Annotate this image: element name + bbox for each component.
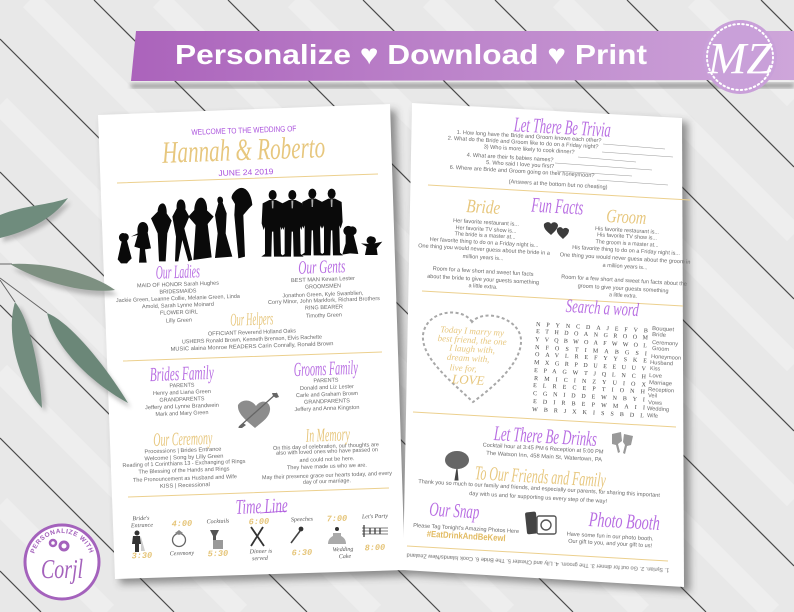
section: our ladies: Amold, Sarah Lynne Moinard [142, 302, 214, 310]
section: our helpers: OFFICIANT Reverend Holland Oaks [208, 328, 296, 338]
badge: personalize with Corjl: PERSONALIZE WITH [30, 528, 94, 554]
section: our ceremony: Welcome | Song by Lilly Green [144, 454, 224, 462]
section: our helpers: Our Helpers [230, 308, 274, 330]
icon: wedding cake [328, 527, 346, 544]
word search grid: NFOSTIMABGSI [535, 345, 647, 357]
section: bride facts [418, 196, 551, 291]
section: bride facts: about the bride to give your guests something [427, 274, 539, 286]
word list: Honeymoon [651, 354, 681, 362]
vow text [437, 324, 507, 388]
leaf: lower right [47, 313, 128, 403]
section: grooms family: Donald and Liz Lester [300, 384, 354, 392]
section: brides family [145, 362, 219, 418]
section: in memory: day of our marriage. [303, 478, 351, 486]
banner headline: Personalize ♥ Download ♥ Print [175, 39, 647, 70]
icon: gears [50, 540, 68, 550]
timeline labels: Dinner is [249, 549, 273, 555]
section: our snap: #EatDrinkAndBeKewl [426, 529, 506, 543]
leaf stem [0, 264, 47, 313]
timeline labels: Ceremony [170, 551, 195, 557]
timeline labels [130, 514, 388, 562]
section: trivia: 3) Who is more likely to cook dinner? [483, 144, 575, 156]
timeline labels: Wedding [332, 547, 353, 553]
icon: champagne glasses [612, 432, 633, 454]
leaf: upper [0, 198, 68, 238]
vow text: Today I marry my [440, 324, 504, 338]
timeline labels: Cake [339, 554, 352, 560]
leaf shadows [3, 202, 131, 412]
timeline labels: Entrance [130, 523, 153, 529]
timeline labels: 4:00 [172, 519, 192, 529]
section: brides family: GRANDPARENTS [159, 396, 205, 404]
logo: MZ monogram [703, 20, 777, 94]
word search grid: RMICINZYUIOX [534, 376, 647, 388]
header: welcome and names: JUNE 24 2019 [218, 167, 274, 178]
section: our ceremony: Processions | Brides Entrance [144, 447, 222, 455]
section: bride facts: Bride [466, 196, 501, 219]
section: timeline [130, 493, 388, 562]
badge: personalize with Corjl [24, 524, 100, 600]
timeline labels: Cocktails [207, 519, 230, 525]
word list: Vows [648, 400, 662, 407]
section: brides family: Jeffery and Lynne Brandwein [145, 403, 219, 411]
heart wreath with vow [423, 312, 521, 402]
section: bride facts: One thing you would never guess about the bride in a [418, 243, 551, 257]
section: grooms family: PARENTS [313, 378, 339, 384]
heading: search a word: Search a word [565, 296, 640, 321]
word search grid: YVQBWOAFWWOL [535, 337, 647, 349]
section: groom facts: Room for a few short and sweet fun facts about the [561, 274, 687, 288]
word list: Wedding [647, 406, 669, 413]
section: groom facts: a million years is... [602, 263, 648, 271]
logo: MZ monogram: MZ [707, 34, 773, 83]
vow text: LOVE [451, 371, 485, 388]
vow text: dream with, [447, 352, 490, 364]
word search grid: ETHDOANGROOM [536, 329, 649, 341]
section: our snap: Our Snap [429, 499, 480, 523]
section: groom facts: Groom [606, 206, 647, 229]
section: our snap: Please Tag Tonight's Amazing Photos Here [413, 523, 519, 535]
section: in memory: and could not be here. [299, 456, 355, 464]
timeline labels: Speeches [291, 517, 314, 523]
icon: cocktail glasses [210, 530, 223, 549]
section: drinks [482, 421, 604, 463]
section: our ladies: MAID OF HONOR Sarah Hughes [137, 281, 219, 289]
section: our ladies: Our Ladies [155, 261, 200, 284]
section: timeline: Time Line [235, 493, 288, 519]
section: our gents: Jonathon Green, Kyle Swanblien, [282, 291, 364, 299]
word search grid: NPYNCDAJEFVB [536, 322, 648, 334]
section: friends and family: To Our Friends and Family [474, 462, 606, 492]
timeline labels: 3:30 [132, 551, 152, 561]
section: brides family: Henry and Liana Green [153, 389, 211, 397]
header: welcome and names: WELCOME TO THE WEDDING OF [191, 124, 297, 137]
section: photo booth [566, 507, 661, 549]
section: our ladies: BRIDESMAIDS [159, 288, 197, 296]
section: our ceremony: The Pronouncement as Husband and Wife [133, 474, 237, 484]
section: bride facts: a little extra. [468, 283, 498, 291]
icon: microphone [291, 527, 303, 543]
icon: phone and camera [525, 511, 556, 534]
section: photo booth: Photo Booth [588, 507, 661, 535]
section: our helpers: MUSIC alaina Monroe READERS Carin Conrally, Ronald Brown [170, 341, 334, 353]
timeline labels: 6:00 [249, 517, 269, 527]
section: grooms family [293, 357, 360, 413]
word list: Bride [652, 332, 666, 339]
icon: heart with arrow [238, 393, 279, 428]
header: welcome and names [161, 124, 326, 178]
section: our ceremony: KISS | Recessional [160, 482, 210, 490]
section: our ladies: Jackie Green, Leanne Collie, Melanie Green, Linda [116, 294, 241, 304]
vow text: live for, [449, 362, 477, 374]
upside-down trivia answers: 1. Syrian. 2. Go out for dinner 3. The groom. 4. Lily and Chester 5. The Bride 6. Cook Islands/New Zealand [406, 551, 669, 573]
section: drinks: Cocktail hour at 3:45 PM 6 Reception at 5:00 PM [482, 443, 604, 455]
section: groom facts: His favorite thing to do on a Friday night is... [572, 245, 681, 257]
section: groom facts: groom to give your guests something [577, 283, 669, 295]
word list: Reception [648, 387, 674, 394]
page shadow [103, 109, 690, 592]
timeline labels: 7:00 [327, 514, 347, 524]
word list: Love [649, 373, 662, 380]
section: our ceremony: Our Ceremony [153, 428, 213, 451]
section: bride facts: The bride is a master at... [454, 231, 516, 241]
section: friends and family [418, 462, 660, 505]
section: in memory: also with loved ones who have passed on [276, 447, 378, 457]
section: trivia: 6. Where are Bride and Groom going on their honeymoon? [450, 165, 595, 179]
section: our ladies [116, 261, 241, 324]
word list: Ceremony [652, 340, 678, 348]
section: grooms family: GRANDPARENTS [304, 398, 350, 406]
section: groom facts: One thing you would never guess about the groom in [559, 252, 691, 266]
section: our gents: Corry Minor, John Markfork, Richard Brothers [268, 296, 380, 306]
word list: Marriage [649, 380, 672, 387]
section: groom facts: a little extra. [609, 292, 638, 300]
section: brides family: PARENTS [169, 383, 195, 389]
section: our gents: GROOMSMEN [305, 283, 341, 291]
word search grid: EDIRBEPWMAII [533, 399, 645, 411]
section: in memory: May their presence grace our hearts today, and every [262, 471, 392, 481]
section: trivia: 5. Who said I love you first? [486, 160, 554, 170]
section: photo booth: Have some fun in our photo booth. [566, 532, 654, 543]
wedding party silhouettes [118, 188, 382, 263]
section: in memory: They have made us who we are. [287, 463, 367, 471]
section: bride facts: Her favorite restaurant is... [453, 218, 520, 228]
banner [131, 31, 794, 88]
section: brides family: Brides Family [149, 362, 214, 386]
section: drinks: Let There Be Drinks [493, 421, 598, 451]
section: our ladies: Lilly Green [166, 318, 192, 324]
word search grid: EPAGWTJQLNCH [534, 368, 647, 380]
section: our gents [268, 256, 380, 320]
section: in memory: In Memory [305, 424, 350, 447]
section: our ceremony: The Blessing of the Hands and Rings [138, 466, 230, 476]
leaf: middle [10, 264, 115, 291]
section: groom facts: His favorite TV show is... [597, 232, 658, 242]
word list: Bouquet [652, 326, 675, 333]
section: groom facts: His favorite restaurant is... [595, 226, 660, 236]
heading: fun facts: Fun Facts [530, 192, 584, 219]
willow leaves [0, 198, 131, 412]
timeline labels: Bride's [132, 516, 150, 522]
section: brides family: Mark and Mary Green [155, 410, 209, 418]
section: trivia: 2. What do the Bride and Groom like to do on a Friday night? [448, 136, 599, 150]
icon: ring [172, 530, 186, 546]
left program page [98, 104, 405, 579]
section: groom facts [559, 206, 691, 300]
section: friends and family: Thank you so much to our family and friends, and especially our parents, for sharing this important [418, 479, 660, 499]
icon: tree [445, 451, 469, 480]
icon: couple [132, 530, 145, 552]
section: grooms family: Carle and Graham Brown [296, 391, 358, 399]
section: our helpers: USHERS Ronald Brown, Kenneth Brenson, Elvis Rachette [182, 335, 322, 345]
section: friends and family: day with us and for supporting us every step of the way! [469, 491, 608, 505]
gold dividers [117, 174, 389, 497]
gold dividers [407, 185, 690, 561]
section: in memory: On this day of celebration, our thoughts are [273, 442, 379, 452]
timeline labels: 6:30 [292, 548, 312, 558]
section: our helpers [170, 308, 334, 353]
word search grid: MXGRPDUEEUUV [534, 360, 647, 372]
word search grid: ELRECEPTIONH [533, 383, 646, 395]
timeline labels: 8:00 [365, 543, 385, 553]
timeline labels: 5:30 [208, 549, 228, 559]
section: groom facts: The groom is a master at... [595, 239, 659, 249]
word search grid: WBRJXKISSBDL [532, 407, 644, 419]
section: grooms family: Grooms Family [293, 357, 358, 381]
section: trivia: (Answers at the bottom but no cheating) [508, 179, 608, 191]
timeline labels: served [252, 556, 269, 562]
right activity page [403, 103, 691, 587]
section: our gents: RING BEARER [305, 304, 343, 312]
badge: personalize with Corjl: Corjl [41, 554, 83, 584]
word list: Wife [647, 413, 658, 420]
word list: Kiss [650, 366, 660, 373]
section: bride facts: Her favorite TV show is... [455, 225, 517, 235]
section: bride facts: Her favorite thing to do on a Friday night is... [429, 237, 539, 249]
section: our ceremony [122, 428, 246, 490]
section: bride facts: Room for a few short and sweet fun facts [432, 266, 534, 278]
word list [647, 326, 681, 420]
section: trivia: 1. How long have the Bride and Groom known each other? [457, 130, 602, 144]
section: in memory [262, 424, 392, 486]
section: our gents: BEST MAN Kevan Lester [291, 276, 355, 284]
section: our snap [413, 499, 519, 543]
section: bride facts: million years is... [462, 254, 504, 262]
section: our ladies: FLOWER GIRL [160, 309, 198, 317]
section: trivia [448, 112, 673, 191]
word search grid: OAVLREFYYSKE [535, 352, 647, 364]
section: our ceremony: Reading of 1 Corinthians 13 - Exchanging of Rings [122, 459, 246, 469]
section: grooms family: Jeffery and Anna Kingston [294, 405, 360, 413]
header: welcome and names: Hannah & Roberto [161, 129, 326, 170]
word list: Husband [650, 360, 673, 367]
section: drinks: The Watson Inn, 458 Main St, Watertown, PA [486, 451, 602, 463]
section: trivia: Let There Be Trivia [513, 112, 612, 142]
section: our gents: Timothy Green [306, 312, 342, 320]
word search grid: CGNIDDEWNBYI [533, 391, 645, 403]
word search grid [532, 322, 649, 419]
leaf: lower left [12, 302, 42, 408]
word list: Veil [648, 393, 657, 400]
icon: two hearts [544, 222, 569, 239]
icon: fork and knife [251, 527, 264, 546]
icon: music notes [362, 525, 388, 537]
section: our gents: Our Gents [298, 256, 346, 279]
timeline labels: Let's Party [361, 514, 388, 520]
vow text: I laugh with, [448, 343, 495, 355]
vow text: best friend, the one [437, 333, 507, 347]
word list: Groom [652, 346, 670, 353]
section: photo booth: Our gift to you, and your gift to us! [568, 539, 653, 549]
section: trivia: 4. What are their fs babies names? [466, 153, 554, 164]
